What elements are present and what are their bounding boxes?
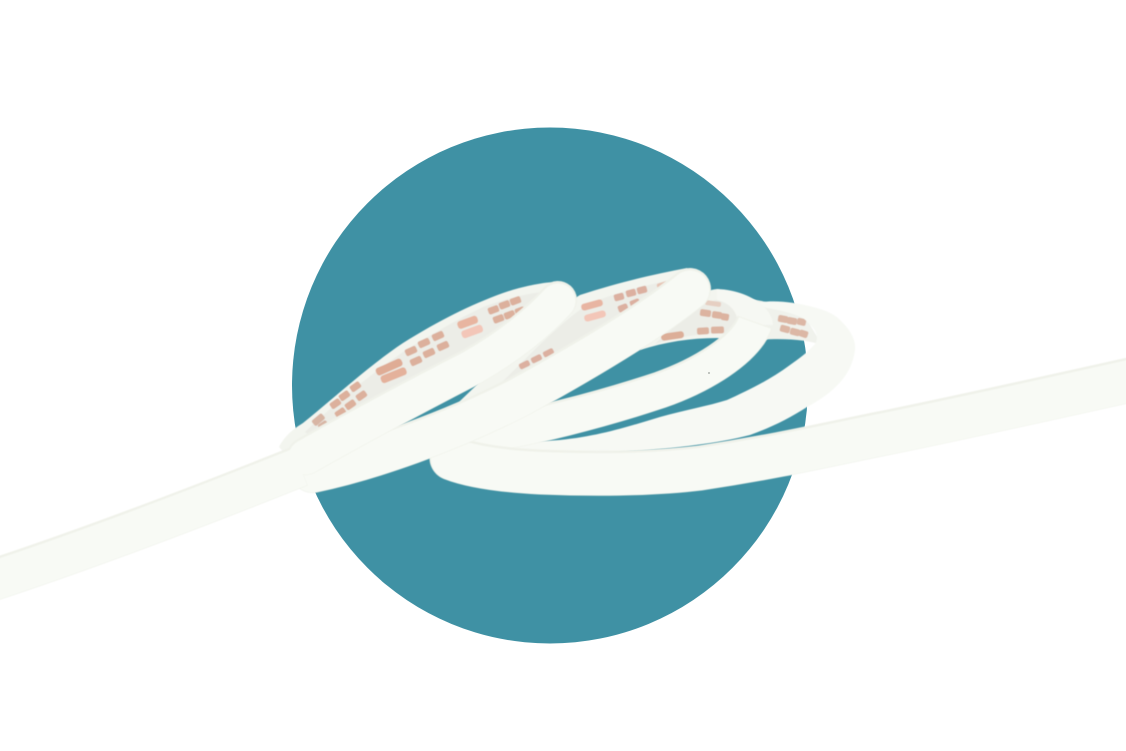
coil 4 inner band <box>740 298 822 345</box>
coil 4: rear loop <box>500 298 855 456</box>
coil 4 tube <box>500 301 855 456</box>
coil 3 pads <box>661 300 730 341</box>
coil 2 pads <box>518 280 673 370</box>
coil 2 inner band <box>450 268 690 410</box>
coil 3 tube <box>470 289 773 438</box>
coil 1 pads <box>311 296 526 430</box>
coil 1 rim <box>279 282 565 470</box>
coil 3: second rear loop <box>470 289 773 438</box>
coil 2 tube <box>312 289 690 473</box>
coil 1 tube and left cable <box>0 300 558 582</box>
background circle <box>292 128 808 644</box>
coil 1 inner strip <box>305 292 543 442</box>
coil 1: front loop with exposed strip <box>0 282 565 582</box>
front tube: outgoing cable to right edge <box>452 380 1126 474</box>
coil 4 pads <box>777 315 809 339</box>
surface speck <box>708 372 710 374</box>
coil 3 inner band <box>640 289 757 350</box>
coil 2: middle loop <box>312 268 690 473</box>
